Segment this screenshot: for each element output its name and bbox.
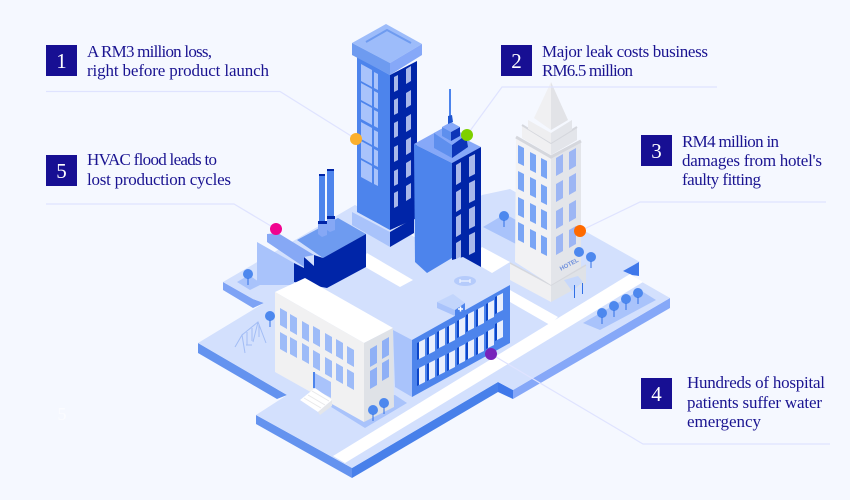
- callout 4: hospital water emergency: 4: [651, 382, 662, 406]
- entrance steps: [300, 388, 332, 415]
- chimneys: [318, 169, 335, 237]
- callout 1: product launch loss: A RM3 million loss,: [87, 42, 212, 61]
- callout 2: major leak: Major leak costs business: [542, 42, 708, 61]
- hospital roof box: [437, 294, 465, 320]
- callout 3: hotel faulty fitting: faulty fitting: [682, 170, 762, 189]
- hotel: [510, 82, 586, 302]
- helipad: [454, 276, 476, 286]
- callout 1: product launch loss: 1: [56, 49, 67, 73]
- planting patches: [237, 214, 656, 428]
- trees: [243, 211, 643, 421]
- swing set: [235, 322, 266, 353]
- hospital: [340, 257, 510, 397]
- callout 2: major leak: RM6.5 million: [542, 61, 634, 80]
- callout 4: hospital water emergency: [485, 348, 830, 444]
- callout 5: HVAC flood: [46, 150, 282, 235]
- hotel entrance canopy: [564, 276, 583, 298]
- callout 3: hotel faulty fitting: 3: [651, 139, 662, 163]
- hotel sign: HOTEL: [559, 258, 580, 273]
- callout 2: major leak: [461, 42, 717, 141]
- callout 4: hospital water emergency: Hundreds of hospital: [687, 373, 825, 392]
- factory: [257, 169, 366, 288]
- callout 4: hospital water emergency: patients suffer water: [687, 393, 822, 412]
- office building: [275, 278, 394, 422]
- callout 3: hotel faulty fitting: [574, 132, 826, 237]
- callout 2: major leak: 2: [511, 49, 522, 73]
- isometric city ground platform: [198, 189, 670, 478]
- callout 5: HVAC flood: HVAC flood leads to: [87, 150, 217, 169]
- white roads: [333, 247, 643, 463]
- tower 2: [414, 89, 481, 273]
- faint stray numeral: 5: [58, 404, 66, 424]
- tower 1: [352, 24, 422, 247]
- callout 1: product launch loss: [46, 42, 362, 145]
- callout 1: product launch loss: right before product launch: [87, 61, 270, 80]
- callout 3: hotel faulty fitting: damages from hotel's: [682, 151, 822, 170]
- callout 5: HVAC flood: 5: [56, 159, 67, 183]
- callout 5: HVAC flood: lost production cycles: [87, 170, 231, 189]
- callout 4: hospital water emergency: emergency: [687, 412, 762, 431]
- callout 3: hotel faulty fitting: RM4 million in: [682, 132, 780, 151]
